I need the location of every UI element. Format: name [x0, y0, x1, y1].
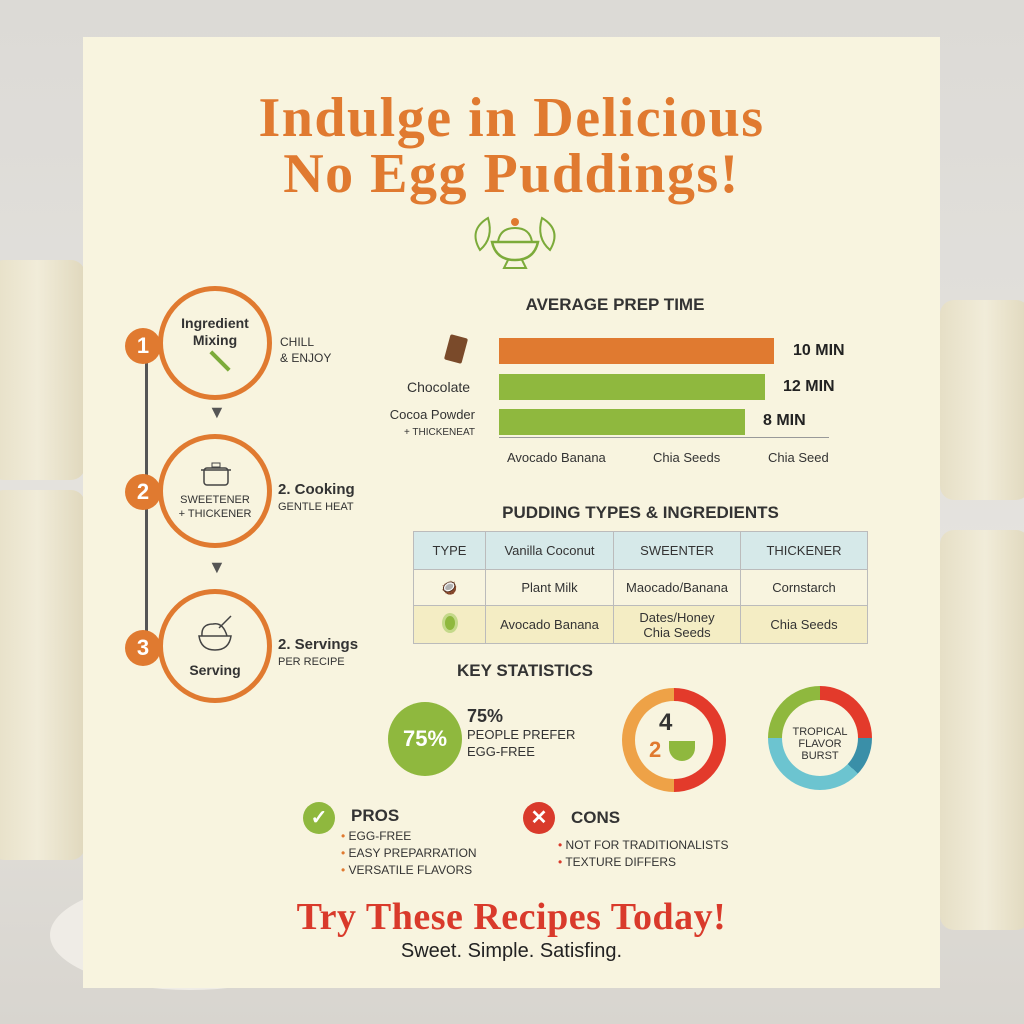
key statistics: EGG-FREE — [467, 744, 535, 759]
pros: • EASY PREPARRATION — [341, 846, 477, 860]
process steps: 3 — [137, 635, 149, 660]
cons: ✕ — [531, 807, 547, 829]
process steps: ▼ — [208, 557, 226, 577]
table: pudding types: THICKENER — [766, 543, 842, 558]
process steps — [125, 286, 358, 703]
pros: ✓ — [311, 807, 327, 829]
key statistics: KEY STATISTICS — [457, 661, 593, 680]
process steps: 2. Cooking — [278, 481, 355, 498]
stat: 75% — [388, 702, 462, 776]
icon: pudding bowl with leaves — [474, 216, 556, 269]
table: pudding types: Maocado/Banana — [626, 580, 728, 595]
process steps: 2. Servings — [278, 636, 358, 653]
table: pudding types: Dates/Honey — [639, 610, 715, 624]
bar chart: average prep time: 10 MIN — [793, 342, 845, 359]
cons: • TEXTURE DIFFERS — [558, 855, 676, 869]
process steps: 2 — [137, 479, 149, 504]
process steps: 1 — [137, 333, 149, 358]
bar chart: average prep time — [390, 295, 845, 465]
process steps: CHILL — [280, 335, 314, 349]
stat: tropical donut: TROPICAL — [792, 726, 848, 738]
step 1: Mixing — [193, 332, 237, 348]
step 2: + THICKENER — [179, 508, 251, 520]
pros: • VERSATILE FLAVORS — [341, 863, 472, 877]
table: pudding types: Vanilla Coconut — [504, 543, 595, 558]
bar chart: average prep time: AVERAGE PREP TIME — [526, 295, 704, 314]
table: pudding types: Chia Seeds — [770, 617, 838, 632]
step 3: Serving — [189, 662, 241, 678]
title: Indulge in Delicious — [258, 87, 765, 149]
pros: PROS — [351, 806, 399, 825]
stat: tropical donut: FLAVOR — [798, 738, 842, 750]
stat: tropical donut — [768, 686, 872, 790]
main panel — [83, 37, 940, 988]
key statistics — [388, 661, 872, 792]
cons: CONS — [571, 808, 620, 827]
tagline: Sweet. Simple. Satisfing. — [401, 940, 622, 962]
table: pudding types: PUDDING TYPES & INGREDIENTS — [502, 503, 779, 522]
table: pudding types: 🥥 — [441, 580, 458, 594]
bar chart: average prep time: + THICKENEAT — [404, 427, 475, 438]
cons — [523, 802, 728, 869]
process steps: & ENJOY — [280, 351, 331, 365]
bar chart: average prep time: Avocado Banana — [507, 450, 606, 465]
stat: donut 4/2: 4 — [659, 709, 672, 736]
bar chart: average prep time: Chia Seeds — [653, 450, 720, 465]
bar chart: average prep time: 12 MIN — [783, 378, 835, 395]
pros: • EGG-FREE — [341, 829, 411, 843]
table: pudding types: TYPE — [433, 543, 466, 558]
bar chart: average prep time: Chocolate — [407, 379, 470, 395]
pros — [303, 802, 477, 877]
step 1: Ingredient — [181, 315, 249, 331]
arrow: ▼ — [208, 402, 226, 422]
key statistics: 75% — [467, 706, 503, 726]
process steps: GENTLE HEAT — [278, 501, 354, 513]
table: pudding types — [413, 503, 868, 644]
step 3 — [158, 589, 272, 703]
stat: tropical donut: BURST — [801, 750, 839, 762]
title — [258, 87, 765, 205]
step 1 — [158, 286, 272, 400]
stat: donut 4/2 — [622, 688, 726, 792]
stat: 75%: 75% — [403, 726, 447, 751]
table: pudding types: Chia Seeds — [643, 624, 711, 640]
table: pudding types: Plant Milk — [521, 580, 578, 595]
cons: • NOT FOR TRADITIONALISTS — [558, 838, 728, 852]
bar chart: average prep time: Cocoa Powder — [390, 407, 475, 422]
table: pudding types: SWEENTER — [640, 543, 714, 558]
key statistics: PEOPLE PREFER — [467, 727, 575, 742]
call to action: Try These Recipes Today! — [297, 896, 726, 938]
bar chart: average prep time: Chia Seed — [768, 450, 829, 465]
process steps: PER RECIPE — [278, 656, 345, 668]
bar chart: average prep time: 8 MIN — [763, 412, 806, 429]
step 2 — [158, 434, 272, 548]
stat: donut 4/2: 2 — [649, 737, 661, 762]
step 2: SWEETENER — [180, 494, 250, 506]
table: pudding types: Cornstarch — [772, 580, 836, 595]
table: pudding types: Avocado Banana — [500, 617, 599, 632]
title: No Egg Puddings! — [283, 143, 740, 205]
